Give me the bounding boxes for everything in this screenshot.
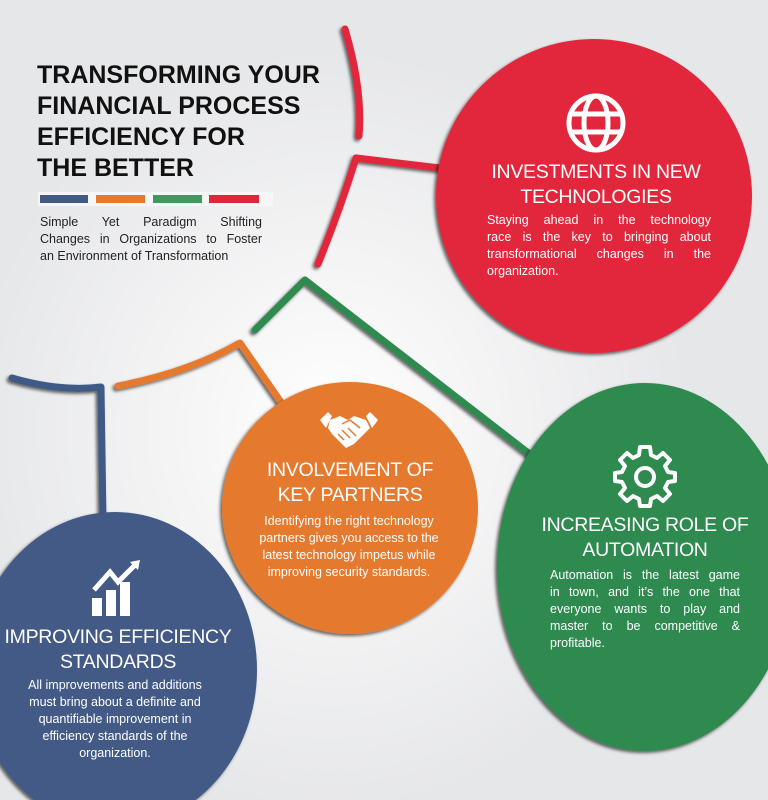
heading: partners: KEY PARTNERS	[278, 484, 422, 506]
body: automation: profitable.	[550, 636, 605, 650]
body: automation: Automation is the latest game	[550, 568, 740, 582]
heading: investments: INVESTMENTS IN NEW	[491, 161, 701, 183]
subtitle: Changes in Organizations to Foster	[40, 232, 262, 246]
circle: orange	[222, 382, 478, 634]
body: automation: everyone wants to play and	[550, 602, 740, 616]
body: automation: in town, and it’s the one that	[550, 585, 740, 599]
body: efficiency: All improvements and additions	[28, 678, 202, 692]
body: investments: transformational changes in the	[487, 247, 711, 261]
heading: efficiency: STANDARDS	[60, 651, 176, 673]
body: partners: latest technology impetus while	[262, 548, 436, 562]
title: EFFICIENCY FOR	[37, 123, 245, 151]
body: efficiency: must bring about a definite and	[29, 695, 201, 709]
heading: investments	[491, 161, 701, 208]
body: partners: improving security standards.	[268, 565, 430, 579]
body: partners: Identifying the right technology	[264, 514, 434, 528]
heading: efficiency: IMPROVING EFFICIENCY	[5, 626, 231, 648]
title	[37, 61, 320, 182]
title: FINANCIAL PROCESS	[37, 92, 300, 120]
heading: automation: INCREASING ROLE OF	[542, 514, 748, 536]
body: efficiency: quantifiable improvement in	[39, 712, 191, 726]
body: efficiency: efficiency standards of the	[42, 729, 188, 743]
heading: automation	[542, 514, 748, 561]
subtitle: an Environment of Transformation	[40, 249, 228, 263]
title: THE BETTER	[37, 154, 194, 182]
circle: green	[497, 383, 768, 751]
body: partners: partners gives you access to the	[259, 531, 439, 545]
icon: growth chart	[92, 560, 140, 616]
heading: partners: INVOLVEMENT OF	[267, 459, 433, 481]
body: investments: race is the key to bringing about	[487, 230, 711, 244]
body: efficiency: organization.	[79, 746, 151, 760]
body: partners	[259, 514, 439, 579]
color bars	[38, 192, 273, 206]
icon: gear	[613, 445, 677, 508]
circle: red	[436, 39, 752, 353]
heading: efficiency	[5, 626, 232, 673]
body: investments: Staying ahead in the technology	[487, 213, 711, 227]
body: investments	[487, 213, 711, 278]
body: efficiency	[28, 678, 202, 760]
icon: handshake	[320, 412, 378, 448]
heading: investments: TECHNOLOGIES	[520, 186, 672, 208]
icon: globe	[566, 94, 626, 152]
title: TRANSFORMING YOUR	[37, 61, 320, 89]
body: investments: organization.	[487, 264, 559, 278]
subtitle	[40, 215, 262, 263]
body: automation	[550, 568, 740, 650]
heading: automation: AUTOMATION	[582, 539, 708, 561]
subtitle: Simple Yet Paradigm Shifting	[40, 215, 262, 229]
body: automation: master to be competitive &	[550, 619, 740, 633]
heading: partners	[267, 459, 433, 506]
circle: blue	[0, 512, 257, 800]
